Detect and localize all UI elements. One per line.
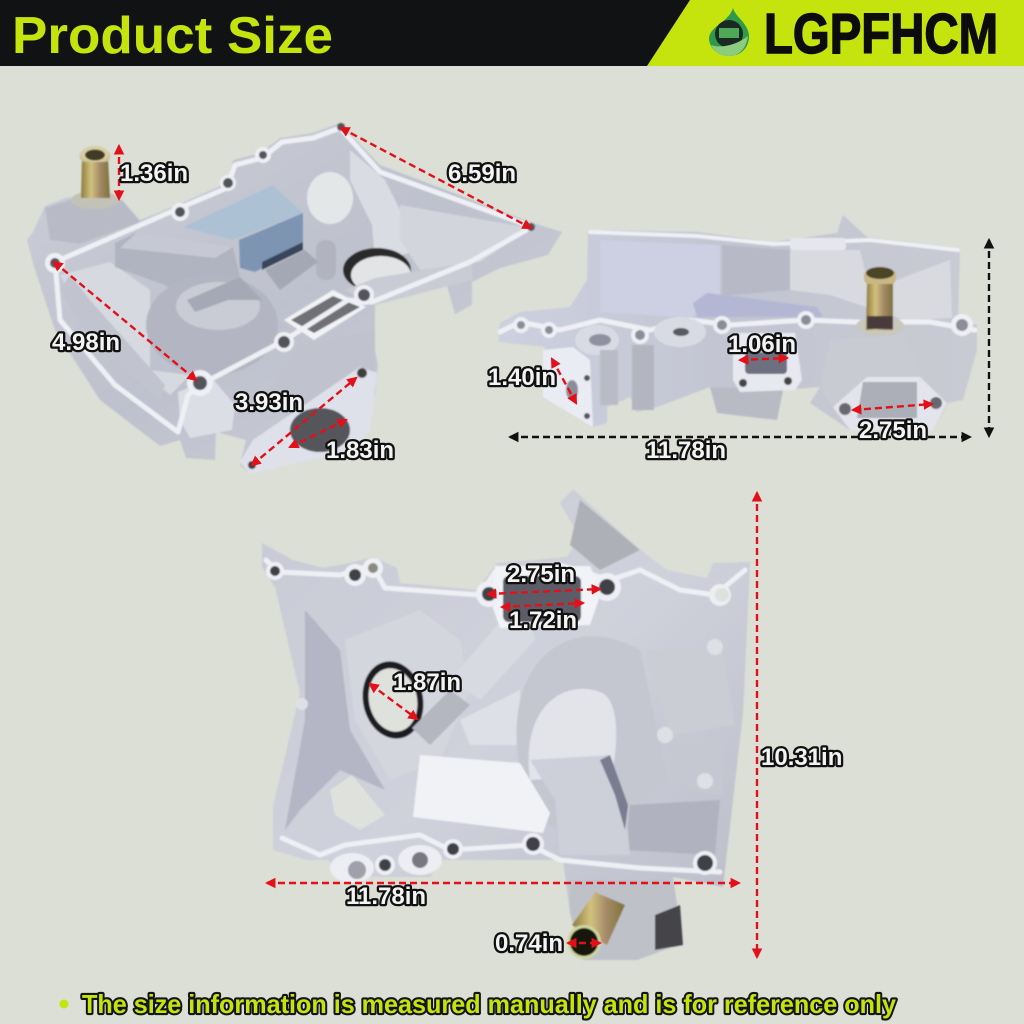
pipe (856, 316, 904, 336)
lower-left hole (330, 775, 385, 830)
dimension labels: 11.78in (346, 883, 426, 910)
left channel shadow (285, 610, 385, 830)
dimension labels: 1.72in (509, 607, 577, 634)
bottom housing (570, 880, 683, 960)
dimension labels: 4.98in (52, 329, 120, 356)
dimension labels: 1.40in (488, 364, 556, 391)
valve box (115, 232, 240, 300)
centre stem (530, 755, 630, 855)
header bar (0, 0, 1024, 66)
columns (632, 345, 654, 410)
bright interior (600, 240, 720, 318)
product view: inner face (262, 489, 750, 960)
dimension labels: 1.06in (728, 331, 796, 358)
bolt lug block (178, 378, 235, 438)
dome (146, 275, 278, 375)
light cover plate (413, 755, 550, 833)
gasket lines (55, 128, 530, 262)
flange triangle (240, 367, 377, 474)
small port gasket (733, 333, 802, 392)
bottom pipe (572, 892, 625, 945)
right panel (645, 650, 735, 735)
dimension labels: 2.75in (507, 561, 575, 588)
bosses (296, 639, 723, 789)
big hole (307, 172, 353, 224)
lower bosses (575, 325, 619, 355)
title: Product Size (12, 7, 333, 65)
diagonal boss (412, 690, 470, 745)
dimension labels: 11.78in (646, 437, 726, 464)
pipe fitting (71, 191, 119, 209)
arc casting (517, 636, 668, 850)
top rim (590, 232, 958, 250)
thermostat housing (820, 335, 925, 407)
footer note: The size information is measured manually and is for reference only (82, 989, 897, 1019)
gasket rim (266, 560, 745, 595)
upper housing (570, 500, 640, 570)
dimension labels: 1.83in (326, 437, 394, 464)
water pipe base housing (45, 200, 140, 244)
dimension labels: 6.59in (448, 160, 516, 187)
bracket box (710, 387, 783, 420)
dimension labels: 1.87in (393, 669, 461, 696)
oil seal (356, 656, 430, 744)
dimension arrows (54, 128, 989, 957)
interior left (60, 262, 190, 395)
dimension labels: 3.93in (235, 389, 303, 416)
product view: back side (498, 215, 977, 430)
dimension labels (52, 160, 927, 957)
oil seal (343, 248, 411, 292)
dimension labels: 1.36in (120, 160, 188, 187)
dimension labels: 0.74in (495, 930, 563, 957)
dimension labels: 2.75in (859, 417, 927, 444)
water port opening (284, 290, 366, 340)
bolt lugs (266, 558, 717, 875)
product view: angled front (27, 123, 562, 474)
gasket lobes (45, 147, 374, 396)
dimension labels: 10.31in (761, 744, 842, 771)
bolt holes (50, 123, 535, 390)
side flange (543, 347, 593, 427)
cover plate (693, 293, 823, 317)
ribs behind plate (265, 250, 318, 290)
upper casting highlights (350, 150, 420, 262)
lower rail (500, 320, 975, 332)
icon: brand logo drop (709, 8, 749, 56)
blue plate (183, 185, 303, 240)
